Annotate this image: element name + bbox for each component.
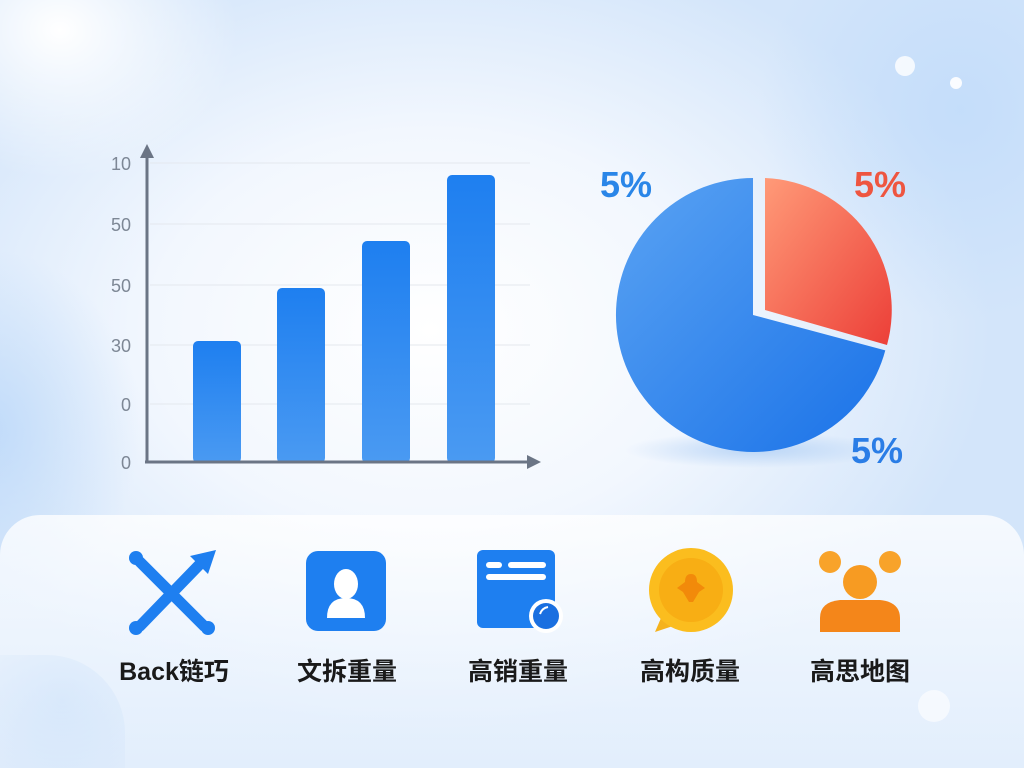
percent labels: 5%	[851, 430, 903, 471]
pie chart	[600, 164, 906, 471]
blue left tint	[0, 250, 140, 610]
percent labels	[600, 164, 906, 471]
icon: gold coin	[649, 548, 733, 632]
axis labels: 0	[121, 453, 131, 473]
icon: document with lens	[477, 550, 563, 633]
axis labels: 50	[111, 215, 131, 235]
bottom panel	[0, 515, 1024, 768]
label: 文拆重量: 文拆重量	[297, 658, 397, 686]
axis labels	[111, 154, 131, 473]
bars	[193, 175, 495, 463]
label: 高思地图: 高思地图	[810, 658, 910, 686]
label: 高销重量: 高销重量	[468, 658, 568, 686]
decorative circle bottom-left	[0, 655, 125, 768]
axis labels: 0	[121, 395, 131, 415]
axes	[145, 152, 532, 462]
background glow	[0, 0, 240, 180]
percent labels: 5%	[600, 164, 652, 205]
red slice	[765, 178, 892, 345]
percent labels: 5%	[854, 164, 906, 205]
decorative dots	[895, 56, 915, 76]
blue corner tint	[760, 0, 1024, 320]
blue slice	[616, 178, 885, 452]
icon: profile card	[306, 551, 386, 631]
icon: people group	[819, 551, 901, 632]
icon: crossed arrows	[129, 550, 216, 635]
label: 高构质量: 高构质量	[640, 658, 740, 686]
bar chart	[111, 144, 541, 473]
label: Back: Back链巧	[119, 658, 229, 686]
axis labels: 50	[111, 276, 131, 296]
axis labels: 30	[111, 336, 131, 356]
axis labels: 10	[111, 154, 131, 174]
